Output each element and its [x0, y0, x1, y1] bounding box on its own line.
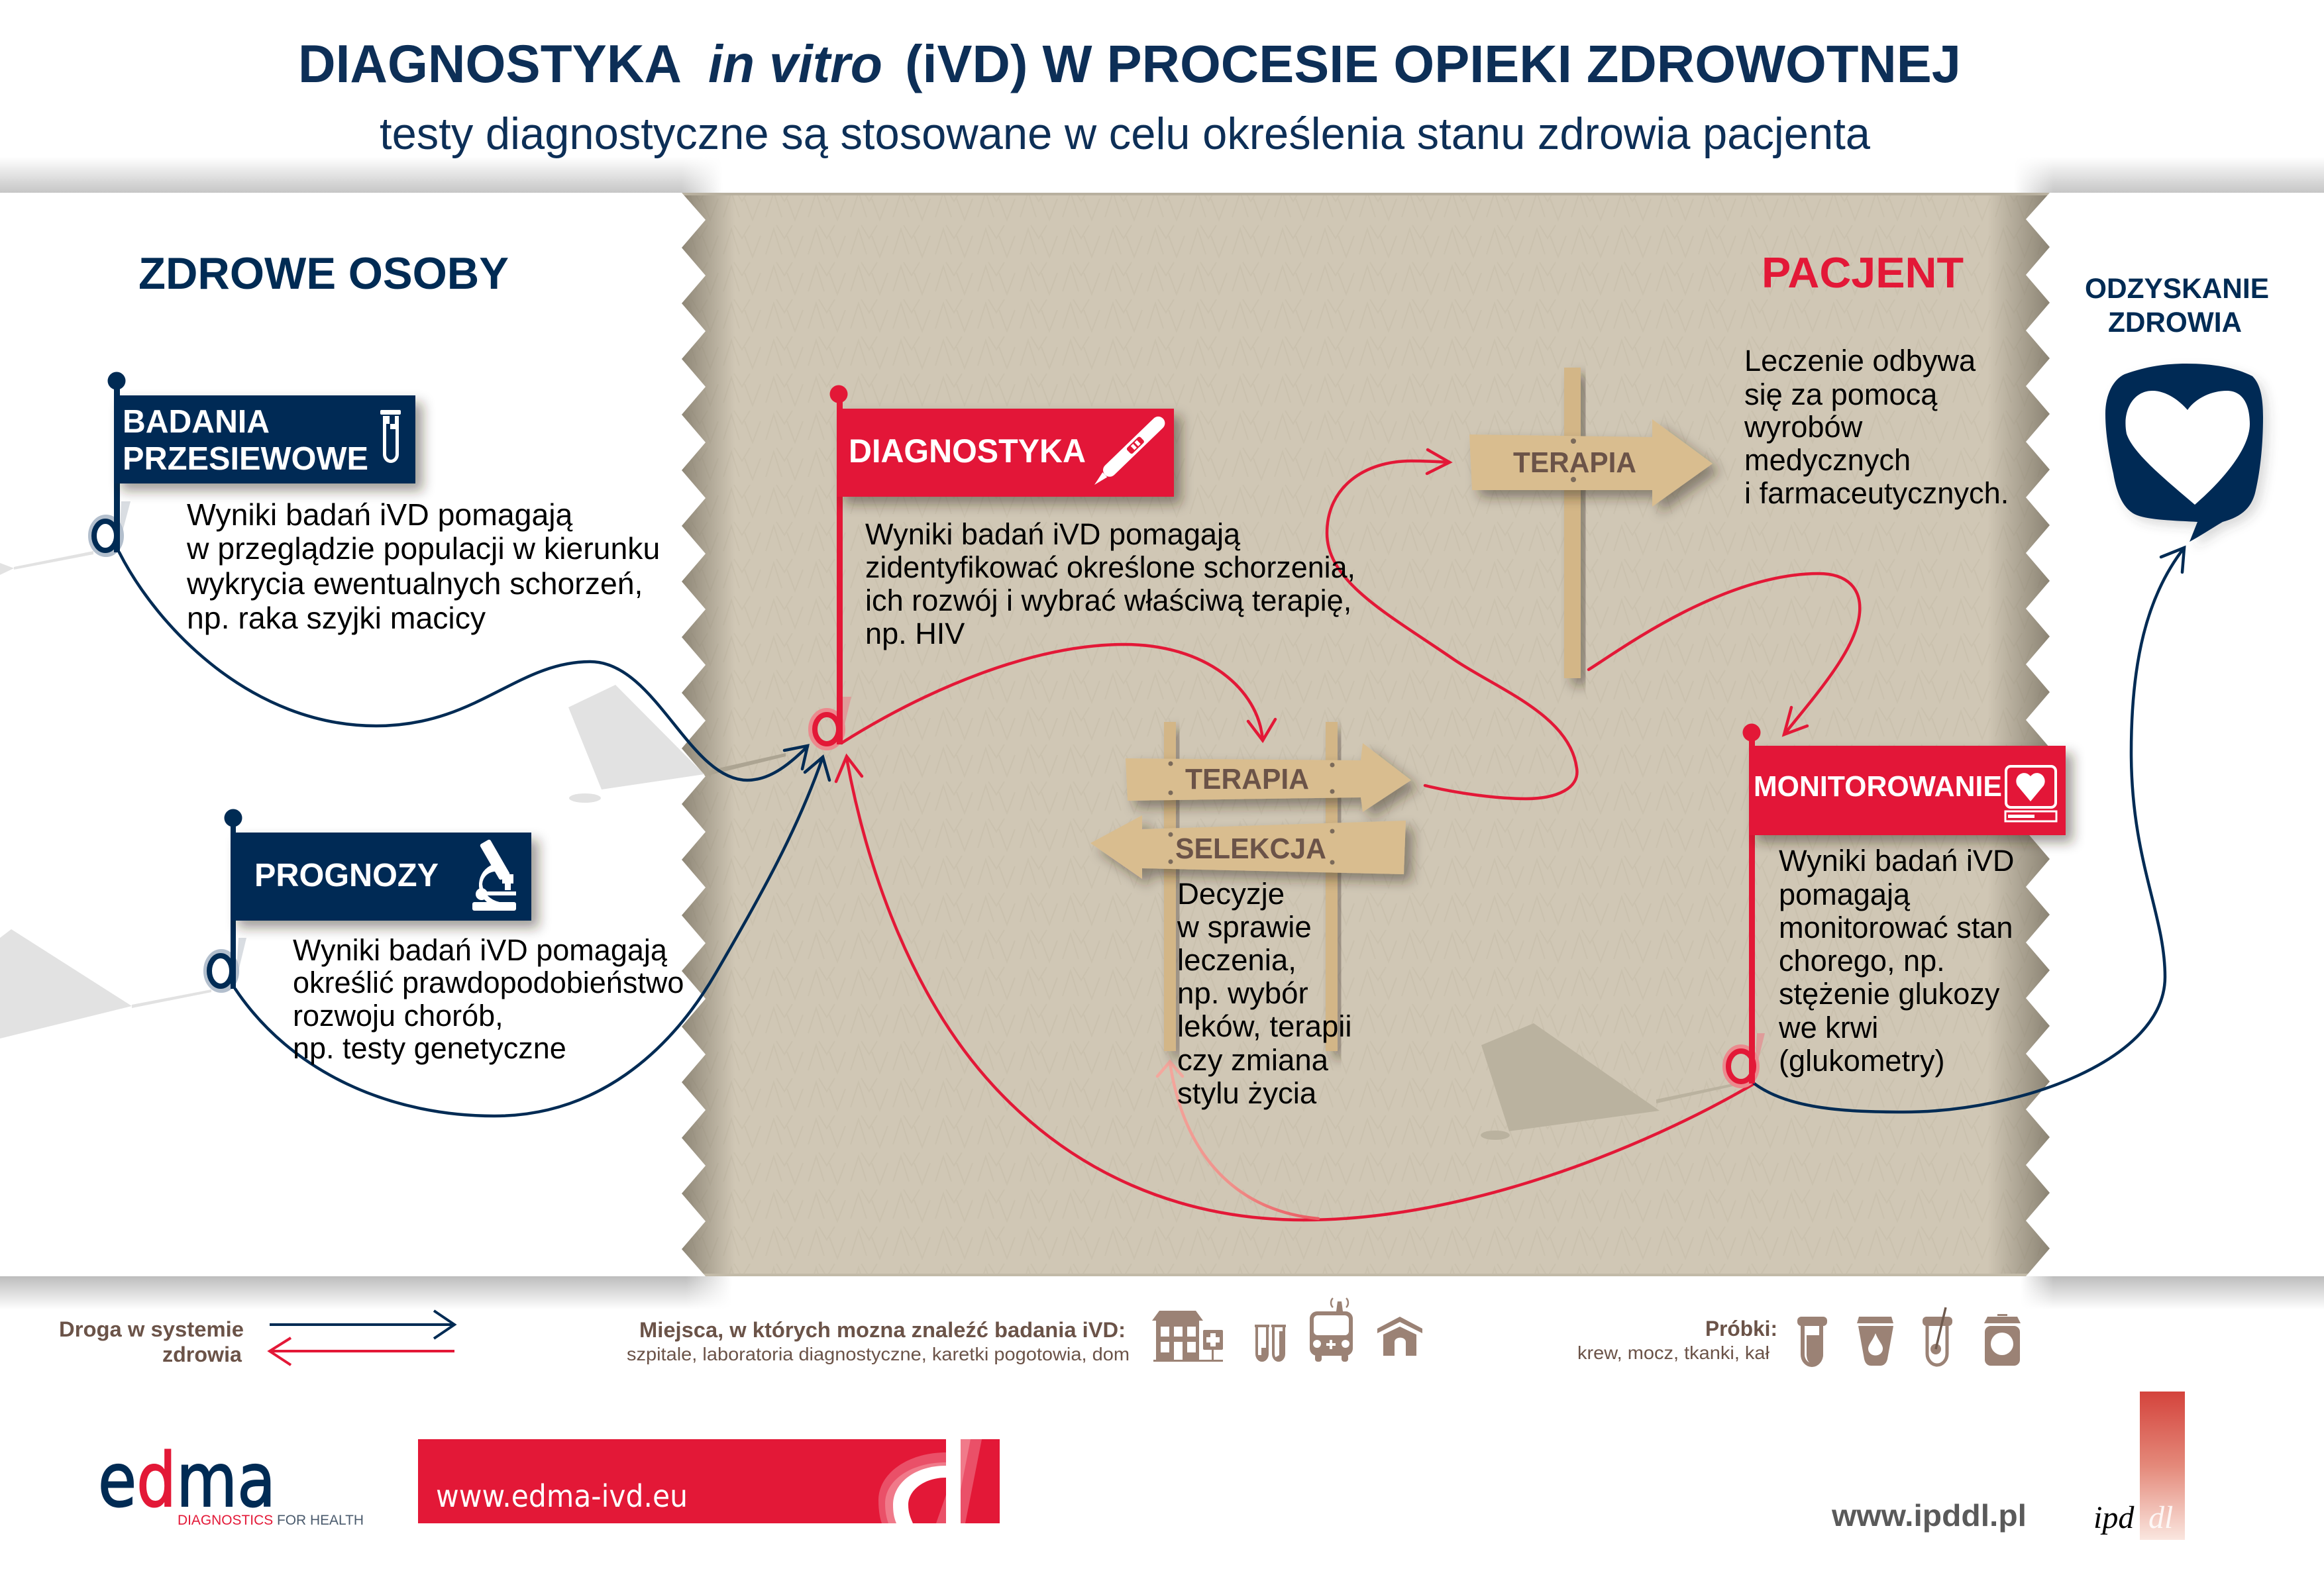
- text: selekcja: czy zmiana: [1177, 1043, 1329, 1077]
- arrow: terapia to leczenie: [1327, 450, 1577, 799]
- icon: test tubes: [1255, 1326, 1286, 1361]
- text: prognozy: [293, 933, 684, 1065]
- arrow: diagnostyka to terapia: [841, 644, 1275, 743]
- background flag shadow left edge: [0, 551, 93, 575]
- logo: edma: edma: [98, 1438, 276, 1524]
- shadow above left panel: [0, 152, 727, 193]
- background flag shadow on band: [1481, 1023, 1733, 1140]
- signpost: terapia and selekcja: SELEKCJA: [1175, 833, 1326, 865]
- shadow below right panel: [2021, 1276, 2324, 1311]
- flag: badania przesiewowe: BADANIA: [123, 404, 270, 440]
- text: leczenie: [1744, 344, 2009, 510]
- flag: prognozy: [207, 809, 531, 989]
- text: diagnostyka: np. HIV: [865, 617, 965, 650]
- title: [298, 34, 1961, 94]
- text: monitorowanie: pomagają: [1779, 878, 1911, 911]
- icon: house: [1377, 1317, 1422, 1356]
- flag: diagnostyka: [812, 385, 1174, 746]
- text: diagnostyka: Wyniki badań iVD pomagają: [865, 517, 1241, 551]
- banner: edma website: www.edma-ivd.eu: [436, 1478, 688, 1514]
- text: leczenie: się za pomocą: [1744, 378, 1938, 411]
- text: badania przesiewowe: Wyniki badań iVD pomagają: [187, 497, 573, 532]
- text: selekcja: w sprawie: [1177, 910, 1312, 944]
- flag: monitorowanie: MONITOROWANIE: [1754, 770, 2002, 803]
- text: selekcja: leczenia,: [1177, 943, 1296, 977]
- panel: recovery zigzag: [2026, 193, 2324, 1276]
- panel: healthy people zigzag: [0, 193, 706, 1276]
- logo: ipdl: dl: [2148, 1500, 2173, 1535]
- logo: ipdl: ipd: [2093, 1500, 2135, 1535]
- text: monitorowanie: stężenie glukozy: [1779, 977, 2000, 1011]
- text: monitorowanie: we krwi: [1778, 1011, 1878, 1044]
- icon: blood tube: [1797, 1317, 1827, 1365]
- arrow: monitorowanie back to diagnostyka: [836, 756, 1754, 1220]
- heading: zdrowe osoby: ZDROWE OSOBY: [138, 248, 509, 299]
- signpost: terapia and selekcja: [1090, 722, 1411, 1051]
- subtitle: testy diagnostyczne są stosowane w celu określenia stanu zdrowia pacjenta: [380, 109, 1870, 159]
- text: badania przesiewowe: np. raka szyjki macicy: [187, 601, 486, 635]
- arrow: monitorowanie to recovery: [1754, 548, 2184, 1112]
- icon: heart speech bubble: [2105, 364, 2263, 542]
- panel: beige patient band: [676, 193, 2054, 1276]
- heading: pacjent: PACJENT: [1762, 248, 1964, 297]
- text: monitorowanie: chorego, np.: [1779, 944, 1945, 978]
- title: DIAGNOSTYKA: [298, 34, 682, 94]
- text: monitorowanie: [1778, 844, 2014, 1078]
- heading: odzyskanie zdrowia: [2085, 274, 2269, 338]
- flag: diagnostyka: DIAGNOSTYKA: [849, 432, 1086, 470]
- icon: ambulance: [1310, 1298, 1353, 1362]
- legend: places: Miejsca, w których mozna znaleźć badania iVD:: [639, 1318, 1126, 1342]
- text: prognozy: np. testy genetyczne: [293, 1031, 566, 1065]
- text: badania przesiewowe: wykrycia ewentualnych schorzeń,: [186, 566, 643, 601]
- text: diagnostyka: ich rozwój i wybrać właściwą terapię,: [865, 583, 1351, 617]
- icon: microscope: [472, 839, 516, 911]
- text: selekcja: leków, terapii: [1177, 1009, 1352, 1043]
- banner: edma website: [418, 1439, 1000, 1523]
- text: diagnostyka: zidentyfikować określone schorzenia,: [865, 550, 1355, 584]
- shadow above right panel: [2014, 152, 2324, 193]
- legend: samples: Próbki:: [1705, 1317, 1777, 1341]
- text: badania przesiewowe: w przeglądzie populacji w kierunku: [186, 531, 660, 566]
- icon: hospital: [1152, 1311, 1223, 1362]
- text: selekcja: Decyzje: [1177, 877, 1285, 911]
- icon: sample jar: [1984, 1314, 2021, 1366]
- icon: test pen: [1090, 414, 1168, 489]
- logo: edma: DIAGNOSTICS FOR HEALTH: [178, 1513, 364, 1528]
- arrow: badania to diagnostyka: [119, 552, 808, 780]
- text: prognozy: rozwoju chorób,: [293, 999, 503, 1033]
- arrow: leczenie to monitorowanie: [1589, 574, 1860, 735]
- title: in vitro: [708, 34, 882, 93]
- text: monitorowanie: Wyniki badań iVD: [1779, 844, 2014, 878]
- title: (iVD) W PROCESIE OPIEKI ZDROWOTNEJ: [905, 34, 1961, 93]
- text: selekcja: [1177, 877, 1352, 1110]
- arrow: branch to selekcja: [1157, 1062, 1318, 1219]
- signpost: terapia and selekcja: TERAPIA: [1185, 763, 1309, 795]
- legend: samples: [1577, 1317, 1777, 1363]
- text: prognozy: określić prawdopodobieństwo: [293, 966, 684, 999]
- signpost: terapia top: [1469, 368, 1713, 678]
- legend: path in the health system: Droga w systemie: [59, 1317, 244, 1341]
- flag: monitorowanie: [1726, 723, 2066, 1084]
- icon: test tube: [380, 410, 401, 463]
- legend: path in the health system: zdrowia: [162, 1343, 242, 1366]
- flag: prognozy: PROGNOZY: [254, 858, 439, 893]
- flag: badania przesiewowe: [92, 372, 415, 553]
- background flag shadow upper: [568, 685, 786, 803]
- icon: monitor with heart: [2005, 766, 2056, 821]
- logo: ipdl: www.ipddl.pl: [1831, 1498, 2027, 1533]
- text: monitorowanie: (glukometry): [1779, 1044, 1945, 1078]
- text: badania przesiewowe: [186, 497, 660, 635]
- text: leczenie: medycznych: [1744, 443, 1911, 477]
- signpost: terapia top: TERAPIA: [1513, 446, 1636, 479]
- arrow: prognozy to diagnostyka: [235, 757, 829, 1116]
- text: leczenie: Leczenie odbywa: [1744, 344, 1976, 378]
- legend: places: [627, 1318, 1130, 1364]
- heading: odzyskanie zdrowia: ZDROWIA: [2108, 307, 2242, 338]
- logo: ipdl: [1831, 1392, 2185, 1540]
- text: leczenie: i farmaceutycznych.: [1744, 476, 2009, 510]
- flag: badania przesiewowe: PRZESIEWOWE: [123, 441, 368, 477]
- legend: samples: krew, mocz, tkanki, kał: [1577, 1343, 1770, 1363]
- icon: urine cup: [1857, 1317, 1893, 1366]
- text: prognozy: Wyniki badań iVD pomagają: [293, 933, 668, 967]
- heading: odzyskanie zdrowia: ODZYSKANIE: [2085, 274, 2269, 305]
- text: selekcja: stylu życia: [1177, 1076, 1317, 1110]
- text: leczenie: wyrobów: [1744, 410, 1863, 444]
- text: diagnostyka: [865, 517, 1355, 650]
- legend: path in the health system: [59, 1311, 454, 1366]
- text: selekcja: np. wybór: [1177, 976, 1308, 1010]
- legend: places: szpitale, laboratoria diagnostyczne, karetki pogotowia, dom: [627, 1344, 1130, 1364]
- text: monitorowanie: monitorować stan: [1779, 911, 2013, 944]
- background flag shadow lower left: [0, 929, 211, 1039]
- shadow below left panel: [0, 1276, 736, 1311]
- icon: tissue swab tube: [1923, 1307, 1952, 1365]
